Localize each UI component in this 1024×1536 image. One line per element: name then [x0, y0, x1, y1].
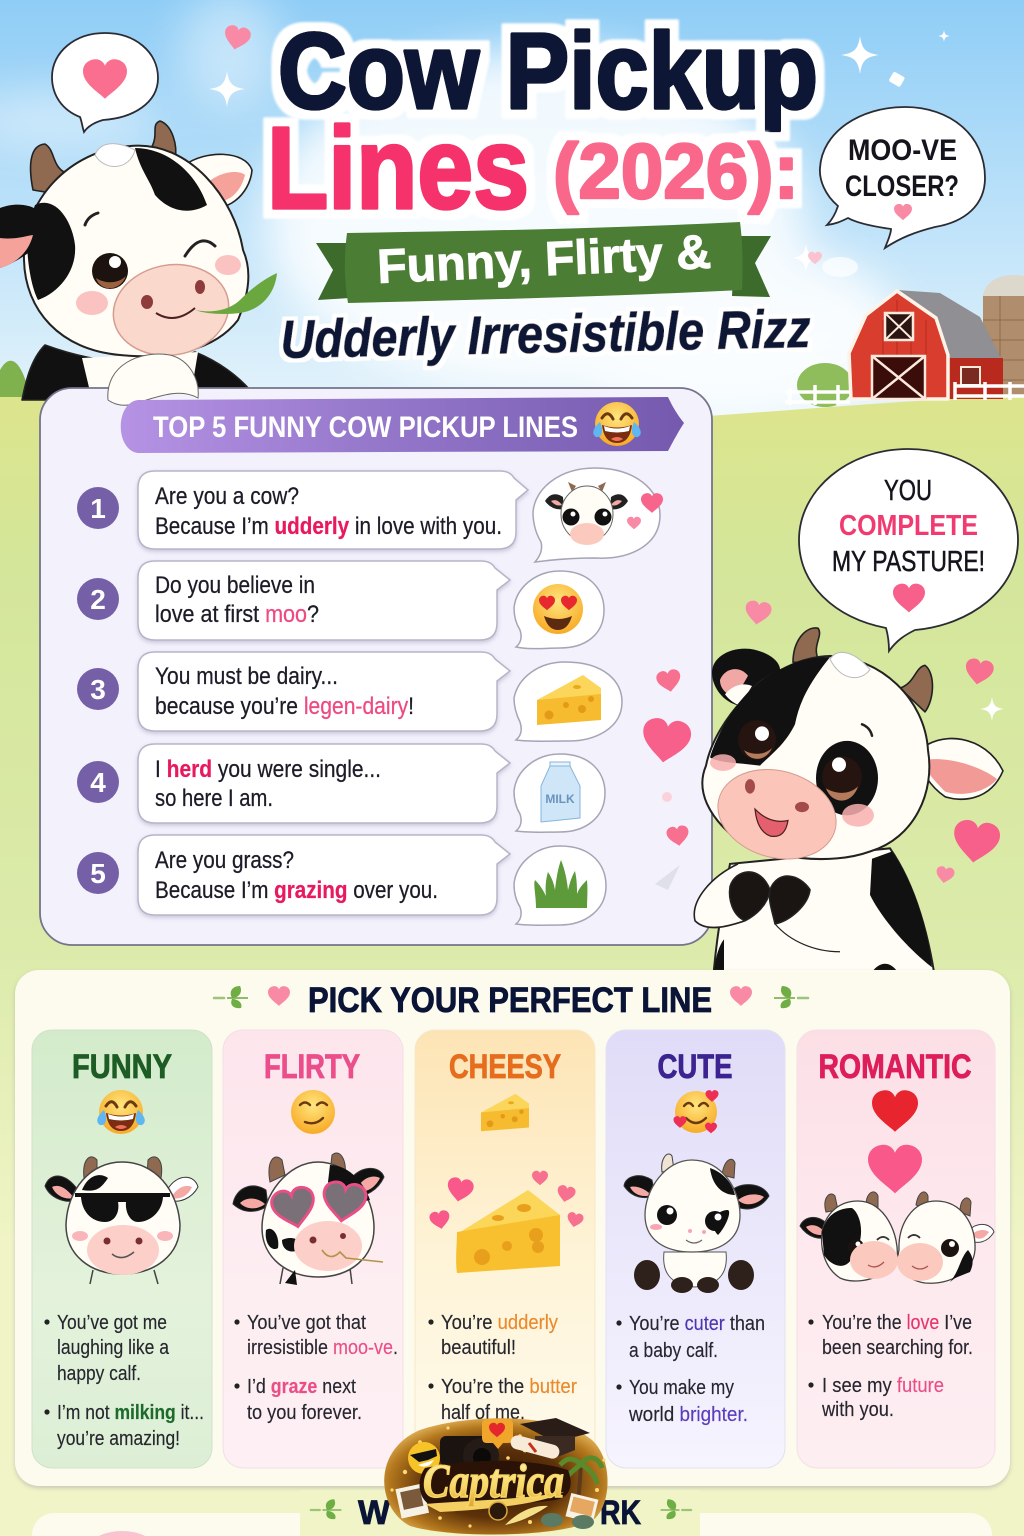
- speech bubble: you complete my pasture: COMPLETE: [839, 510, 978, 542]
- section heading: partly hidden: RK: [600, 1494, 641, 1532]
- row 1: Because I’m udderly in love with you.: [155, 513, 502, 540]
- card: cute: CUTE: [658, 1048, 732, 1086]
- bullet text: irresistible moo-ve.: [247, 1337, 398, 1359]
- bullet text: to you forever.: [247, 1402, 362, 1424]
- black patches: [0, 148, 207, 300]
- speech bubble: you complete my pasture: YOU: [884, 475, 932, 507]
- card: cheesy: [415, 1030, 595, 1468]
- muzzle: [709, 757, 845, 871]
- section heading: partly hidden: W: [358, 1494, 391, 1532]
- speech bubble: heart: [52, 33, 158, 132]
- head: [702, 656, 929, 859]
- bullet text: [808, 1312, 973, 1421]
- icon: pink heart: [868, 1145, 922, 1193]
- left ear inner: [0, 235, 33, 268]
- big cheese with hearts: [429, 1171, 584, 1273]
- left ear: [712, 649, 780, 706]
- background: lower pale field: [0, 950, 1024, 1536]
- speech bubble: you complete my pasture: MY PASTURE!: [832, 546, 985, 578]
- logo heart badge: [482, 1419, 513, 1449]
- panel: pick your perfect line: [15, 970, 1010, 1486]
- bullet text: You’ve got me: [57, 1312, 167, 1334]
- speech bubble: you complete my pasture: [799, 449, 1018, 651]
- head: [24, 146, 248, 356]
- row 1: 1: [90, 493, 106, 524]
- emoji bubble: cow: [533, 468, 663, 562]
- logo photos and sunglasses: [395, 1483, 598, 1529]
- barn side wall: [945, 358, 1003, 399]
- fences: [785, 382, 1024, 405]
- emoji bubble: grass: [514, 846, 606, 925]
- row 4: so here I am.: [155, 785, 273, 812]
- panel: top 5 funny cow pickup lines: [40, 354, 712, 945]
- panel: next section, partly visible: [32, 1513, 992, 1536]
- row 1: Are you a cow?: [155, 483, 299, 510]
- logo wordmark backing: [420, 1461, 571, 1506]
- section heading: partly hidden: [300, 1490, 700, 1536]
- row 3: You must be dairy...: [155, 663, 338, 690]
- row 4: 4: [90, 767, 106, 798]
- title: year: (2026):: [553, 127, 799, 215]
- bullet text: You’ve got that: [247, 1312, 366, 1334]
- bullet text: [44, 1312, 204, 1450]
- muzzle: [106, 256, 236, 364]
- row 4: I herd you were single...: [155, 756, 381, 783]
- barn roof side: [897, 290, 1003, 362]
- row 2: [77, 561, 510, 640]
- watermark logo: Captrica: [384, 1418, 608, 1535]
- row 5: 5: [90, 858, 106, 889]
- icon: laughing: [97, 1090, 145, 1134]
- tuft: [830, 652, 870, 678]
- hair tuft: [95, 144, 135, 166]
- bullet text: I’m not milking it...: [57, 1402, 204, 1424]
- card: funny: [32, 1030, 212, 1468]
- icon: smiling face with hearts: [674, 1090, 718, 1133]
- arms and paws: [694, 864, 840, 952]
- bullet text: [616, 1313, 765, 1426]
- leaf: [195, 273, 277, 314]
- right ear: [185, 154, 252, 208]
- row 5: Because I’m grazing over you.: [155, 877, 438, 904]
- background: soft clouds: [0, 0, 900, 420]
- trees: [797, 363, 853, 407]
- background: sky: [0, 0, 1024, 430]
- bullet text: with you.: [821, 1399, 894, 1421]
- card: flirty: FLIRTY: [264, 1048, 360, 1086]
- eyebrow and wink: [85, 213, 215, 256]
- emoji bubble: cheese: [514, 662, 622, 741]
- row 3: 3: [90, 674, 106, 705]
- decorative hearts and sparkles in sky: [209, 24, 950, 277]
- emoji bubble: heart eyes: [514, 571, 604, 649]
- row 5: [77, 835, 510, 915]
- bullet text: you’re amazing!: [57, 1428, 180, 1450]
- row 4: [77, 744, 510, 823]
- cow with sunglasses: [45, 1157, 198, 1284]
- two cows nuzzling: [800, 1192, 994, 1283]
- ribbon text: Funny, Flirty &: [376, 226, 712, 294]
- logo camera: [440, 1436, 499, 1474]
- horns: [31, 121, 176, 192]
- distant hill left: [0, 361, 30, 397]
- section heading: PICK YOUR PERFECT LINE: [308, 981, 712, 1020]
- row 1: [77, 471, 528, 549]
- logo palm: [560, 1458, 602, 1500]
- card: romantic: [797, 1030, 995, 1468]
- bullet text: half of me.: [441, 1402, 525, 1424]
- row 3: [77, 652, 510, 731]
- blush: [76, 255, 241, 315]
- card: flirty: [223, 1030, 403, 1468]
- title: Cow Pickup: Cow Pickup: [278, 10, 818, 131]
- row 2: Do you believe in: [155, 572, 315, 599]
- background: pasture: [0, 395, 1024, 960]
- bullet text: a baby calf.: [629, 1340, 718, 1362]
- icon: cheese: [481, 1094, 529, 1131]
- logo ribbon shapes: [425, 1492, 564, 1525]
- cow: right mascot: [694, 628, 1003, 993]
- head patch: [710, 657, 830, 766]
- subtitle ribbon: [316, 222, 771, 303]
- card: cheesy: CHEESY: [449, 1048, 561, 1086]
- icon: smirking: [291, 1090, 335, 1134]
- bullet text: I see my future: [822, 1375, 944, 1397]
- floating hearts near panel: [639, 600, 1004, 890]
- body: [22, 345, 258, 400]
- bullet text: beautiful!: [441, 1337, 516, 1359]
- barn door: [872, 356, 925, 399]
- bullet text: been searching for.: [822, 1337, 973, 1359]
- icon: laughing emoji: [593, 402, 641, 446]
- logo wordmark: Captrica: [423, 1455, 564, 1508]
- row 3: because you’re legen-dairy!: [155, 693, 414, 720]
- cow: top left mascot: [0, 121, 277, 400]
- body spots: [713, 851, 932, 993]
- emoji bubble: milk carton: MILK: [545, 792, 575, 806]
- panel heading text: TOP 5 FUNNY COW PICKUP LINES: [153, 411, 578, 444]
- bullet text: You’re cuter than: [629, 1313, 765, 1335]
- cow with heart glasses: [233, 1153, 384, 1285]
- eyes: [738, 720, 878, 815]
- bullet text: happy calf.: [57, 1363, 141, 1385]
- horns: [793, 628, 932, 712]
- row 2: love at first moo?: [155, 601, 319, 628]
- logo graduation cap and diploma: [509, 1418, 590, 1460]
- speech bubble: moo-ve closer: [820, 107, 985, 248]
- bullet text: world brighter.: [628, 1404, 748, 1426]
- speech bubble: moo-ve closer: MOO-VE: [848, 134, 957, 167]
- blush: [710, 754, 874, 827]
- barn farm scene: [785, 275, 1024, 407]
- bullet text: You’re the love I’ve: [822, 1312, 972, 1334]
- bullet text: You’re udderly: [441, 1312, 558, 1334]
- bullet text: [428, 1312, 577, 1424]
- card: romantic: ROMANTIC: [818, 1048, 972, 1086]
- brow: [862, 724, 872, 736]
- row 5: Are you grass?: [155, 847, 294, 874]
- bullet text: laughing like a: [57, 1337, 170, 1359]
- side window: [961, 367, 980, 385]
- barn front: [849, 291, 948, 399]
- card: cute: [606, 1030, 785, 1468]
- bullet text: You make my: [629, 1377, 734, 1399]
- cow paw over panel: [108, 354, 198, 405]
- row 2: 2: [90, 584, 106, 615]
- logo emoji with sunglasses: [408, 1442, 440, 1474]
- sitting baby cow: [624, 1154, 769, 1293]
- title: Lines: Lines: [267, 103, 529, 233]
- panel heading ribbon: [121, 397, 684, 453]
- card: funny: FUNNY: [72, 1048, 172, 1086]
- speech bubble: moo-ve closer: CLOSER?: [845, 170, 959, 203]
- logo glitter: [390, 1426, 606, 1528]
- bullet text: You’re the butter: [441, 1376, 577, 1398]
- emoji bubble: milk carton: [514, 754, 605, 832]
- subtitle: Udderly Irresistible Rizz: Udderly Irresistible Rizz: [280, 299, 811, 370]
- silo: [983, 275, 1024, 395]
- eye: [92, 253, 128, 289]
- bullet text: I’d graze next: [247, 1376, 356, 1398]
- bullet text: [234, 1312, 398, 1424]
- right ear: [917, 739, 1003, 799]
- icon: red heart: [872, 1090, 918, 1132]
- body: [712, 848, 937, 993]
- barn loft window: [885, 313, 913, 340]
